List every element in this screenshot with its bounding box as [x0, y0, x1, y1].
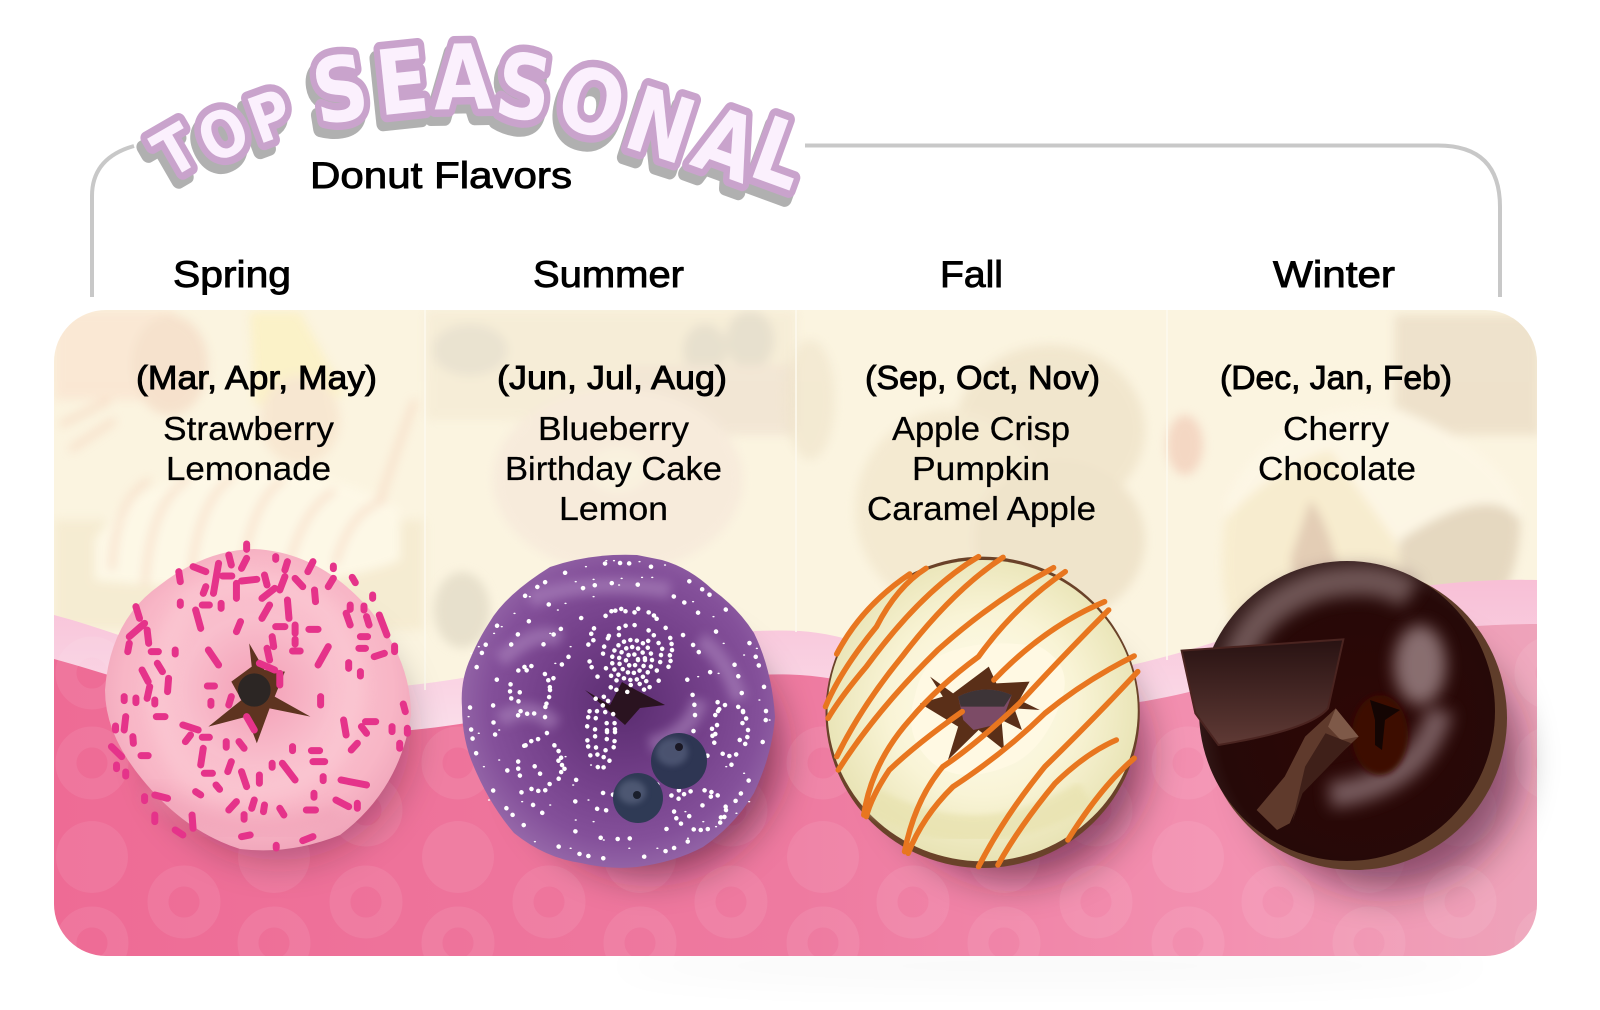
chocolate shard — [1182, 639, 1343, 745]
season heading: Spring: Spring — [173, 254, 291, 295]
title: TOP SEASONAL: A — [681, 86, 772, 204]
flavors: winter — [1258, 410, 1416, 487]
months: winter: (Dec, Jan, Feb) — [1220, 359, 1452, 396]
flavors: winter: Chocolate — [1258, 450, 1416, 487]
pattern: ring circles — [56, 660, 1224, 956]
title: TOP SEASONAL: P — [239, 76, 302, 160]
season heading: Winter: Winter — [1273, 254, 1395, 295]
months: fall: (Sep, Oct, Nov) — [865, 359, 1100, 396]
orange drizzle lines — [826, 557, 1138, 867]
purple donut hole — [585, 682, 665, 725]
title: TOP SEASONAL — [141, 25, 820, 212]
title: TOP SEASONAL: N — [614, 66, 707, 186]
flavors: winter: Cherry — [1283, 410, 1390, 447]
months: spring: (Mar, Apr, May) — [136, 359, 377, 396]
flavors: summer: Lemon — [559, 490, 668, 527]
background photo: fall — [785, 340, 1145, 620]
flavors: spring: Lemonade — [166, 450, 331, 487]
title: TOP SEASONAL: S — [305, 34, 375, 146]
background photo: summer — [426, 310, 796, 648]
title: TOP SEASONAL: A — [433, 25, 493, 131]
donut: blueberry purple — [462, 555, 775, 868]
season heading: Summer: Summer — [533, 254, 684, 295]
title: TOP SEASONAL: L — [739, 96, 820, 212]
donut shadows — [150, 610, 1520, 890]
donut: chocolate — [1182, 561, 1507, 870]
title: TOP SEASONAL: E — [371, 27, 433, 137]
white sprinkle dots — [469, 561, 770, 859]
flavors: fall: Pumpkin — [912, 450, 1050, 487]
chocolate curl — [1257, 708, 1359, 830]
flavors: summer: Blueberry — [538, 410, 690, 447]
donut: strawberry pink — [105, 544, 411, 850]
title: TOP SEASONAL: T — [141, 110, 211, 193]
title: TOP SEASONAL: S — [489, 32, 558, 144]
flavors: summer — [505, 410, 722, 527]
flavors: fall: Caramel Apple — [867, 490, 1096, 527]
frame line around heading — [92, 146, 1500, 297]
pink sprinkles — [111, 544, 407, 848]
flavors: fall — [867, 410, 1096, 527]
season heading: Fall: Fall — [940, 254, 1003, 295]
donut: caramel apple cream — [826, 557, 1140, 868]
cream donut hole — [911, 643, 1065, 775]
flavors: spring — [163, 410, 335, 487]
wave: main pink — [54, 624, 1537, 956]
panel: seasons background — [54, 310, 1577, 969]
soft shadow below panel — [610, 946, 1490, 986]
column dividers — [425, 310, 1167, 690]
months: summer: (Jun, Jul, Aug) — [497, 359, 727, 396]
title: TOP SEASONAL: O — [548, 44, 635, 162]
blueberries — [613, 733, 707, 823]
title: TOP SEASONAL: O — [187, 92, 261, 179]
flavors: fall: Apple Crisp — [892, 410, 1070, 447]
pattern: solid circles — [56, 821, 1224, 893]
flavors: spring: Strawberry — [163, 410, 335, 447]
subtitle: Donut Flavors: Donut Flavors — [310, 155, 572, 196]
pink donut hole — [111, 544, 407, 848]
background photo: spring — [54, 310, 424, 630]
background photo: winter — [1167, 315, 1540, 640]
flavors: summer: Birthday Cake — [505, 450, 722, 487]
wave: light band — [54, 580, 1537, 730]
